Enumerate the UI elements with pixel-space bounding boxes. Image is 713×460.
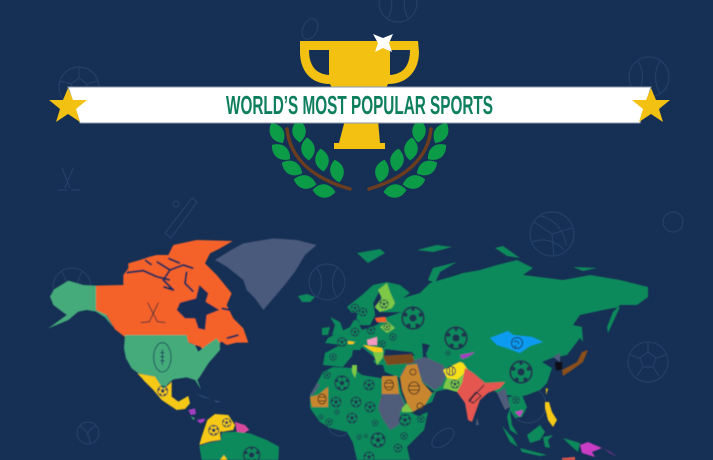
Europe soccer balls <box>330 304 450 360</box>
Canada <box>96 240 248 353</box>
Iran and Iraq <box>400 357 447 390</box>
Japan <box>562 350 588 376</box>
mask icons on orange countries <box>318 369 423 409</box>
Central America <box>188 408 205 423</box>
USA <box>124 335 220 389</box>
Baltic, Black and Caspian seas <box>347 290 430 363</box>
South Korea <box>555 362 562 370</box>
Sumatra, Java, Borneo, Sulawesi, west Papua <box>502 425 580 456</box>
Balkans south <box>373 352 383 365</box>
Turkey <box>383 354 415 365</box>
Mauritania <box>310 387 328 407</box>
Caribbean <box>193 393 222 403</box>
Korea <box>553 353 560 362</box>
Balkans <box>363 345 383 353</box>
map: Eurasia and Africa <box>298 245 648 460</box>
Latvia <box>375 317 387 322</box>
Guianas <box>235 422 249 433</box>
map: Americas lower <box>124 335 279 460</box>
cricket bat icon <box>469 385 484 403</box>
arctic channels <box>127 258 238 345</box>
India <box>457 368 505 422</box>
Africa <box>310 367 428 460</box>
right leaves <box>373 119 453 199</box>
title banner <box>49 87 670 123</box>
Austria area <box>367 337 377 345</box>
Egypt <box>382 376 399 394</box>
Cambodia <box>515 410 523 417</box>
Sudan <box>378 394 405 430</box>
South America <box>199 432 279 460</box>
hockey sticks icon <box>141 303 165 323</box>
Adriatic <box>360 347 378 361</box>
laurel wreath <box>265 119 453 199</box>
title: WORLD’S MOST POPULAR SPORTS <box>226 90 493 120</box>
Myanmar <box>497 388 510 410</box>
Timor <box>562 457 575 460</box>
left leaves <box>265 119 346 199</box>
Afghanistan <box>443 362 468 380</box>
Vietnam ball <box>512 396 520 404</box>
Philippines <box>545 388 557 427</box>
Africa soccer balls <box>318 372 424 460</box>
Sri Lanka <box>476 418 479 425</box>
world map <box>48 238 648 460</box>
Tunisia <box>352 365 357 378</box>
Eritrea <box>402 403 413 412</box>
Greenland <box>215 238 317 310</box>
Western Sahara <box>310 383 320 395</box>
Oman <box>425 392 436 405</box>
Belarus <box>380 322 395 333</box>
map: north America upper <box>48 238 317 353</box>
Saudi Arabia <box>400 364 435 412</box>
Papua New Guinea <box>580 442 618 457</box>
right branch <box>369 129 431 189</box>
white sparkle star <box>373 34 393 52</box>
trophy <box>300 34 419 149</box>
Russia and China soccer balls <box>402 307 532 383</box>
Eurasia <box>323 260 648 397</box>
Red Sea <box>400 379 413 413</box>
left branch <box>287 129 350 189</box>
Hudson Bay <box>177 285 219 330</box>
Belgium area <box>348 341 355 344</box>
Mongolia <box>490 331 543 353</box>
Colombia and Venezuela <box>199 414 235 445</box>
Indochina and Malay peninsula <box>507 395 527 435</box>
Iceland, UK and Ireland <box>298 294 345 335</box>
Mongolia icon <box>512 338 522 348</box>
Kyrgyzstan <box>460 352 475 359</box>
arctic islands <box>357 245 597 283</box>
Pakistan <box>443 370 468 392</box>
Mexico <box>137 373 190 410</box>
Alaska <box>48 281 113 328</box>
right star <box>632 88 670 122</box>
Finland <box>375 283 395 312</box>
left star <box>49 88 87 122</box>
American football icon <box>154 343 171 372</box>
